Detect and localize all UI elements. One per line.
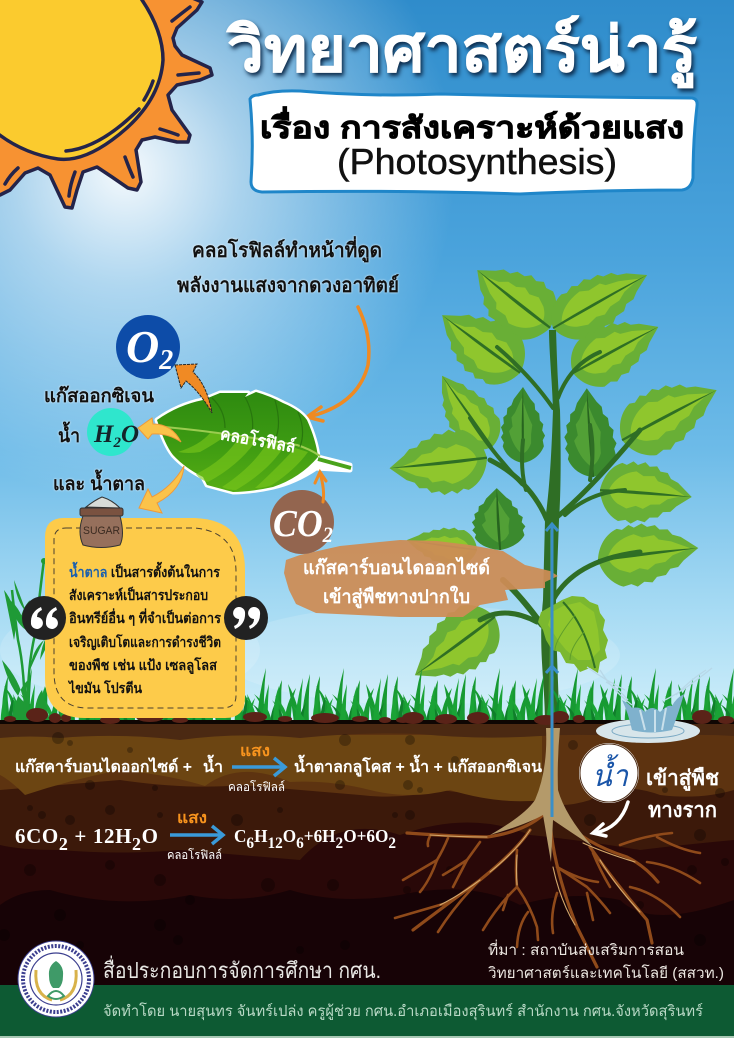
arrow: sugar out xyxy=(139,466,184,513)
source credit: ที่มา : สถาบันส่งเสริมการสอน xyxy=(488,939,684,959)
water text: ทางราก xyxy=(648,799,717,822)
chlorophyll leaf xyxy=(157,392,351,492)
soil layers xyxy=(0,720,734,986)
chemical equation: 2 xyxy=(336,835,343,852)
arrow: oxygen out xyxy=(175,364,212,413)
oxygen label: แก๊สออกซิเจน xyxy=(44,385,154,407)
chemical equation: O xyxy=(283,826,296,846)
callout band: carbon dioxide xyxy=(284,540,558,617)
CO2 formula: 2 xyxy=(322,522,333,547)
sugar info text: น้ำตาล เป็นสารตั้งต้นในการ xyxy=(69,561,220,580)
chemical equation: 2 xyxy=(132,834,141,854)
arrow: water rising through stem xyxy=(546,524,558,817)
grass xyxy=(0,558,734,724)
chemical equation: 12 xyxy=(267,835,283,852)
sugar label: และ น้ำตาล xyxy=(53,469,145,495)
title: วิทยาศาสตร์น่ารู้ xyxy=(226,15,697,88)
word equation: คลอโรฟิลล์ xyxy=(228,780,285,794)
chlorophyll label: คลอโรฟิลล์ xyxy=(219,424,297,456)
organisation name: สื่อประกอบการจัดการศึกษา กศน. xyxy=(103,955,381,983)
CO2 formula: CO xyxy=(273,503,326,545)
icon: left quote xyxy=(22,596,66,640)
word equation: แก๊สคาร์บอนไดออกไซด์ + xyxy=(15,757,192,776)
oxygen circle xyxy=(116,315,180,379)
H2O formula: 2 xyxy=(112,435,121,451)
sugar info text xyxy=(67,561,221,696)
carbon dioxide circle xyxy=(270,490,334,554)
word equation arrow xyxy=(232,758,285,776)
H2O formula: H xyxy=(94,421,113,448)
chemical equation: 6 xyxy=(296,835,304,852)
orange sunlight arrow xyxy=(307,307,369,421)
source credit xyxy=(487,939,724,982)
band text: แก๊สคาร์บอนไดออกไซด์ xyxy=(303,556,490,579)
illustration: plant xyxy=(386,245,731,725)
water label: น้ำ xyxy=(592,754,629,793)
word equation: น้ำ xyxy=(203,754,223,776)
illustration: water splash xyxy=(587,667,712,743)
plant front leaf xyxy=(538,596,608,673)
sky background xyxy=(0,0,734,725)
icon: sugar sack xyxy=(80,497,123,548)
sugar info text: เจริญเติบโตและการดำรงชีวิต xyxy=(69,633,221,651)
plant stem and branches xyxy=(470,330,640,725)
illustration: roots xyxy=(395,728,700,967)
chemical equation: O+6O xyxy=(343,826,388,846)
chlorophyll caption: พลังงานแสงจากดวงอาทิตย์ xyxy=(177,274,399,297)
chemical equation: C xyxy=(234,826,247,846)
O2 formula: O xyxy=(126,321,159,372)
footer text: จัดทำโดย นายสุนทร จันทร์เปล่ง ครูผู้ช่วย กศน.อำเภอเมืองสุรินทร์ สำนักงาน กศน.จังหวัดสุรินทร์ xyxy=(103,1002,703,1021)
chemical equation: O xyxy=(142,824,158,848)
callout band: carbon dioxide: เข้าสู่พืชทางปากใบ xyxy=(323,585,470,609)
chemical equation: 2 xyxy=(59,834,68,854)
illustration: sun xyxy=(0,0,212,208)
logo xyxy=(18,941,94,1017)
water text xyxy=(646,766,719,822)
chemical equation arrow xyxy=(170,826,223,844)
sugar info text: อินทรีย์อื่น ๆ ที่จำเป็นต่อการ xyxy=(68,608,221,626)
subtitle english: (Photosynthesis) xyxy=(337,141,617,182)
water text: เข้าสู่พืช xyxy=(646,766,719,792)
chlorophyll caption: คลอโรฟิลล์ทำหน้าที่ดูด xyxy=(192,235,382,264)
chemical equation: คลอโรฟิลล์ xyxy=(167,848,222,862)
footer band xyxy=(0,985,734,1038)
arrow: water to root xyxy=(593,802,628,836)
icon: sugar sack: SUGAR xyxy=(83,525,120,537)
chemical equation: 6 xyxy=(246,835,254,852)
source credit: วิทยาศาสตร์และเทคโนโลยี (สสวท.) xyxy=(487,964,724,982)
word equation: แสง xyxy=(240,743,270,760)
arrow: water to stem xyxy=(550,670,554,817)
pebbles xyxy=(4,708,734,725)
chlorophyll caption xyxy=(177,235,399,297)
sugar info text: ไขมัน โปรตีน xyxy=(67,679,142,696)
chemical equation: H xyxy=(254,826,267,846)
chemical equation: 6CO xyxy=(15,824,58,848)
O2 formula: 2 xyxy=(158,345,173,376)
sugar info text: สังเคราะห์เป็นสารประกอบ xyxy=(69,586,208,603)
word equation: น้ำตาลกลูโคส + น้ำ + แก๊สออกซิเจน xyxy=(294,754,542,778)
plant leaves behind stem xyxy=(386,245,731,700)
water circle xyxy=(579,743,639,803)
chemical equation: + 12H xyxy=(68,824,131,848)
subtitle box xyxy=(250,91,697,194)
chemical equation xyxy=(15,810,396,862)
water molecule circle xyxy=(87,408,139,456)
soil dots xyxy=(0,732,729,954)
chemical equation: แสง xyxy=(177,810,207,827)
sugar info text: ของพืช เช่น แป้ง เซลลูโลส xyxy=(69,656,217,674)
chemical equation: 2 xyxy=(388,835,396,852)
chemical equation: +6H xyxy=(304,826,336,846)
arrow: water out xyxy=(138,418,181,442)
icon: right quote xyxy=(224,596,268,640)
word equation xyxy=(15,743,542,794)
subtitle thai: เรื่อง การสังเคราะห์ด้วยแสง xyxy=(260,106,684,145)
arrow: carbon dioxide in xyxy=(315,472,326,502)
water label: น้ำ xyxy=(58,421,80,447)
H2O formula: O xyxy=(121,421,139,448)
panel: sugar info xyxy=(45,497,245,718)
